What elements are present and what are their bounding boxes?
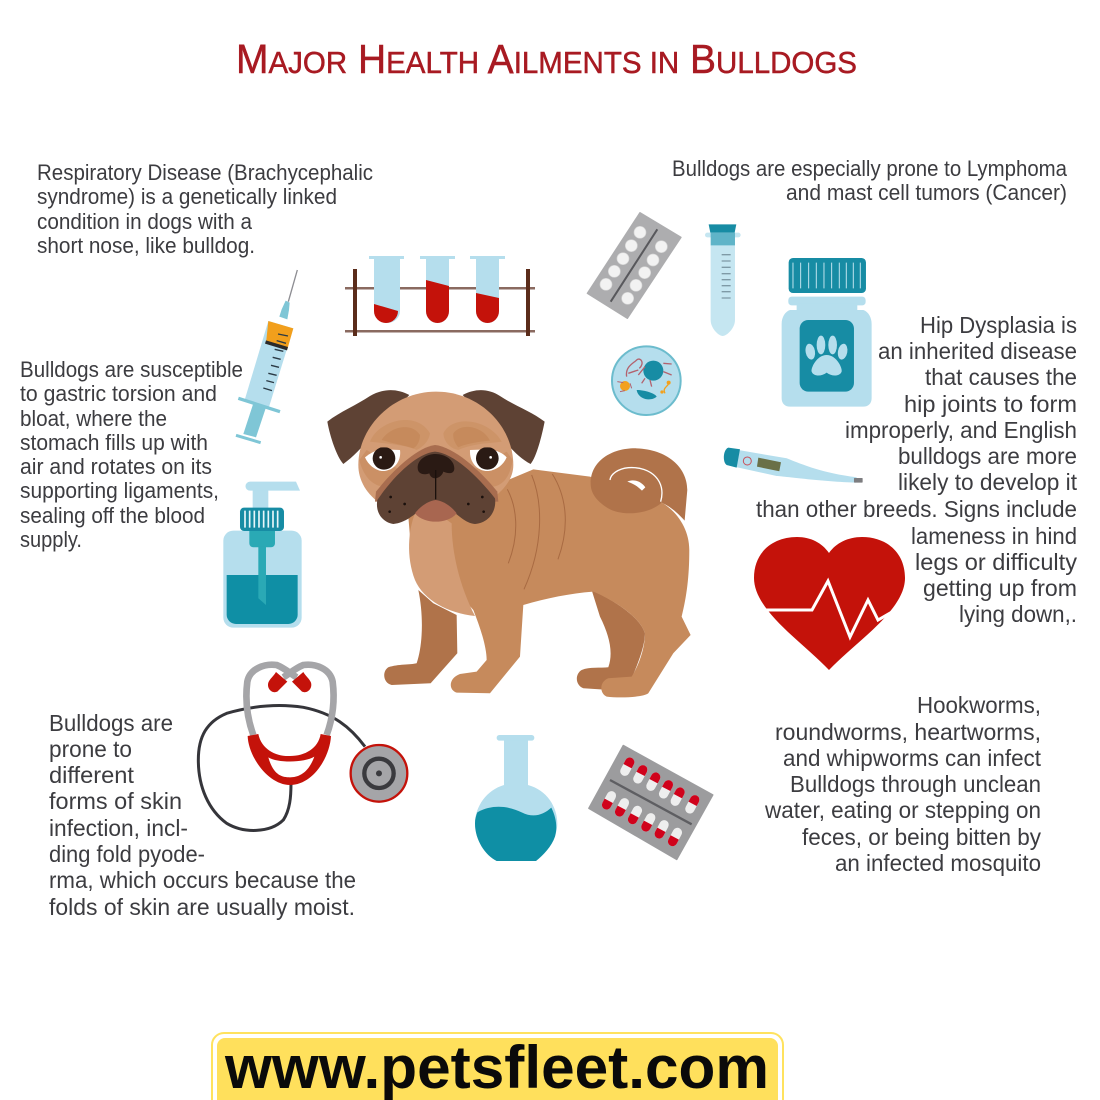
text: hip dysplasia: than other breeds. Signs include xyxy=(756,496,1077,522)
text: lymphoma and mast cell tumors xyxy=(672,156,1068,205)
dog tail xyxy=(591,448,687,521)
text: skin infection: rma, which occurs because the xyxy=(49,867,356,893)
text: hip dysplasia xyxy=(756,312,1078,627)
text: respiratory disease: condition in dogs with a xyxy=(37,209,253,234)
text: lymphoma and mast cell tumors: Bulldogs are especially prone to Lymphoma xyxy=(672,156,1068,181)
text: gastric torsion and bloat: stomach fills up with xyxy=(20,430,208,455)
text: hip dysplasia: Hip Dysplasia is xyxy=(920,312,1077,338)
dog body xyxy=(408,469,691,697)
icon: capsule blister pack xyxy=(589,746,713,859)
text: gastric torsion and bloat xyxy=(20,357,243,552)
dog brows xyxy=(359,420,513,487)
title: MAJOR HEALTH AILMENTS IN BULLDOGS xyxy=(236,36,857,82)
icon: pill blister pack xyxy=(587,213,681,318)
text: hip dysplasia: that causes the xyxy=(925,364,1077,390)
text: skin infection: ding fold pyode- xyxy=(49,841,205,867)
icon: round flask xyxy=(475,735,557,861)
icon: heart with pulse line xyxy=(752,537,906,670)
text: worms xyxy=(764,692,1042,876)
text: skin infection: infection, incl- xyxy=(49,815,188,841)
text: gastric torsion and bloat: bloat, where the xyxy=(20,406,167,431)
text: respiratory disease: Respiratory Disease (Brachycephalic xyxy=(37,160,373,185)
text: worms: roundworms, heartworms, xyxy=(775,719,1041,745)
icon: syringe xyxy=(236,270,297,443)
text: hip dysplasia: lying down,. xyxy=(959,601,1077,627)
dog head xyxy=(358,392,513,510)
dog chest xyxy=(409,510,475,616)
text: skin infection: forms of skin xyxy=(49,788,182,814)
text: gastric torsion and bloat: Bulldogs are susceptible xyxy=(20,357,243,382)
text: gastric torsion and bloat: supporting ligaments, xyxy=(20,478,219,503)
text: skin infection: Bulldogs are xyxy=(49,710,173,736)
dog wrinkles xyxy=(507,474,565,589)
text: skin infection: folds of skin are usually moist. xyxy=(49,894,355,920)
text: skin infection xyxy=(49,710,356,920)
text: lymphoma and mast cell tumors: and mast cell tumors (Cancer) xyxy=(786,180,1067,205)
illustration: pug dog xyxy=(327,390,691,697)
text: worms: water, eating or stepping on xyxy=(764,797,1041,823)
text: hip dysplasia: likely to develop it xyxy=(898,469,1078,495)
dog far legs xyxy=(384,590,645,690)
text: worms: Bulldogs through unclean xyxy=(790,771,1041,797)
text: hip dysplasia: improperly, and English xyxy=(845,417,1077,443)
icon: stethoscope xyxy=(198,665,407,830)
text: gastric torsion and bloat: supply. xyxy=(20,527,82,552)
text: gastric torsion and bloat: sealing off the blood xyxy=(20,503,205,528)
icon: petri dish with bacteria xyxy=(612,346,681,415)
dog eyes xyxy=(363,446,508,471)
icon: test tube rack xyxy=(345,256,535,336)
text: worms: an infected mosquito xyxy=(835,850,1041,876)
text: gastric torsion and bloat: to gastric torsion and xyxy=(20,381,217,406)
dog muzzle xyxy=(375,445,498,524)
icon: medicine bottle with paw xyxy=(782,258,872,407)
website banner: www.petsfleet.com xyxy=(224,1034,769,1100)
text: respiratory disease: short nose, like bulldog. xyxy=(37,233,255,258)
text: respiratory disease: syndrome) is a genetically linked xyxy=(37,184,337,209)
text: hip dysplasia: an inherited disease xyxy=(878,338,1077,364)
text: skin infection: prone to xyxy=(49,736,132,762)
text: skin infection: different xyxy=(49,762,135,788)
icon: thermometer xyxy=(724,448,863,483)
icon: tall test tube xyxy=(705,224,741,336)
text: gastric torsion and bloat: air and rotates on its xyxy=(20,454,212,479)
text: worms: Hookworms, xyxy=(917,692,1041,718)
dog ears xyxy=(327,390,545,464)
text: hip dysplasia: getting up from xyxy=(923,575,1077,601)
text: hip dysplasia: bulldogs are more xyxy=(898,443,1077,469)
text: hip dysplasia: legs or difficulty xyxy=(915,549,1078,575)
text: hip dysplasia: hip joints to form xyxy=(904,391,1077,417)
icon: soap bottle xyxy=(223,482,302,628)
text: hip dysplasia: lameness in hind xyxy=(911,523,1077,549)
text: respiratory disease xyxy=(37,160,373,258)
text: worms: and whipworms can infect xyxy=(783,745,1042,771)
text: worms: feces, or being bitten by xyxy=(802,824,1041,850)
